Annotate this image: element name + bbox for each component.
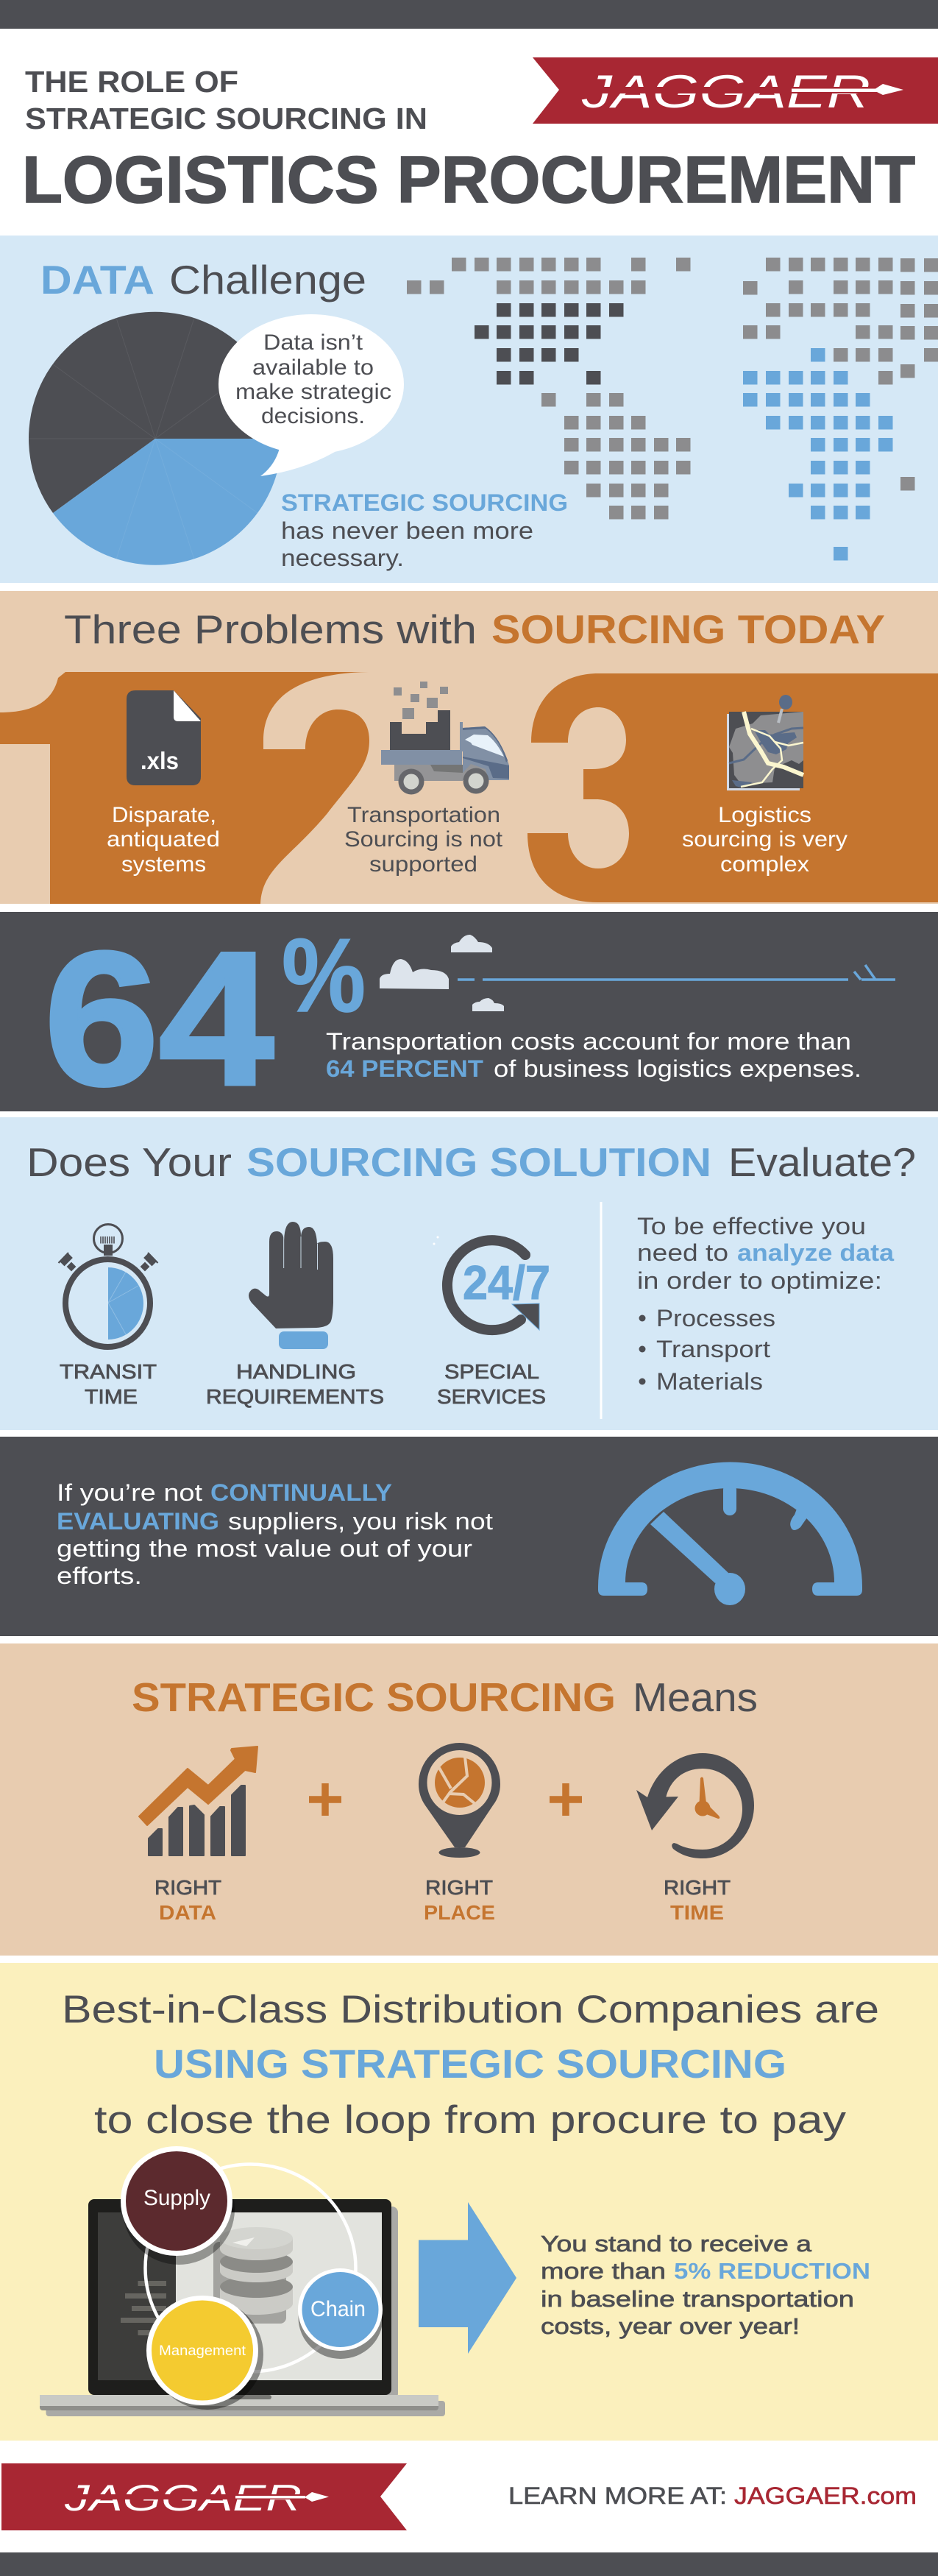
labels: right data, place, time: RIGHT (664, 1876, 731, 1899)
icon: rising chart (139, 1747, 257, 1855)
heading: strategic sourcing means: STRATEGIC SOURCING (132, 1674, 616, 1720)
speech bubble: Data isn’t (263, 330, 363, 355)
text: analyze data: Processes (656, 1305, 775, 1331)
big number 64%: % (282, 917, 366, 1034)
panel: best-in-class (0, 1963, 938, 2441)
labels: transit, handling, special: TRANSIT (60, 1360, 157, 1383)
text: 5% reduction: 5% REDUCTION (674, 2258, 870, 2284)
circle: supply (121, 2146, 232, 2256)
text: problem 1: Disparate, (112, 803, 216, 827)
heading: data challenge (40, 257, 366, 302)
logo ribbon: Jaggaer footer: JAGGAER (64, 2477, 302, 2519)
text: 5% reduction: more than (541, 2258, 666, 2284)
database icon (213, 2227, 293, 2324)
text: learn more: LEARN MORE AT: (508, 2483, 727, 2509)
heading: best-in-class: USING STRATEGIC SOURCING (154, 2041, 786, 2087)
icon: stopwatch (59, 1225, 157, 1347)
heading: three problems: Three Problems with (64, 606, 477, 652)
numerals 1 and 2 (0, 672, 372, 904)
panel: 64 percent (0, 912, 938, 1125)
text: 5% reduction: costs, year over year! (541, 2313, 800, 2339)
labels: transit, handling, special: TIME (85, 1385, 138, 1408)
icon: plus (309, 1783, 341, 1816)
dot world map (407, 258, 938, 561)
heading: three problems: SOURCING TODAY (491, 606, 885, 652)
panel: footer (1, 2463, 917, 2530)
text: analyze data: need to (637, 1239, 728, 1266)
text: problem 3: sourcing is very (682, 827, 848, 852)
heading: sourcing solution: Does Your (26, 1139, 232, 1185)
labels: right data, place, time (154, 1876, 731, 1924)
text: learn more: JAGGAER.com (734, 2483, 917, 2509)
text: continually evaluating: getting the most value out of your (57, 1535, 472, 1562)
text: analyze data: Materials (656, 1368, 763, 1395)
title: THE ROLE OF (25, 65, 238, 99)
text: problem 1: antiquated (107, 827, 220, 852)
text: strategic sourcing necessary (281, 489, 568, 571)
arrow (419, 2202, 516, 2354)
heading: sourcing solution (26, 1139, 916, 1185)
circle: chain: Chain (310, 2297, 366, 2321)
labels: right data, place, time: TIME (670, 1901, 724, 1924)
pie chart (29, 312, 282, 565)
text: problem 1: systems (121, 852, 206, 877)
speech bubble: available to (252, 355, 374, 380)
text: analyze data: in order to optimize: (637, 1267, 882, 1294)
circle: management: Management (159, 2343, 246, 2359)
icon: gauge (598, 1462, 862, 1605)
big number 64%: 64 (44, 912, 275, 1125)
heading: strategic sourcing means: Means (633, 1674, 758, 1720)
speech bubble (218, 314, 404, 476)
text: learn more (508, 2483, 917, 2509)
heading: data challenge: Challenge (169, 257, 366, 302)
text: 5% reduction (541, 2231, 870, 2339)
text: continually evaluating: If you’re not (57, 1479, 202, 1506)
icon: location pin (419, 1743, 500, 1858)
heading: best-in-class (62, 1988, 879, 2142)
labels: transit, handling, special: SERVICES (437, 1385, 546, 1408)
icon: plus (550, 1783, 582, 1816)
text: strategic sourcing necessary: has never been more (281, 517, 533, 544)
text: analyze data: To be effective you (637, 1213, 866, 1239)
icon: xls file: .xls (141, 747, 179, 774)
labels: transit, handling, special: HANDLING (236, 1360, 356, 1383)
icon: plane trail (458, 965, 895, 980)
labels: right data, place, time: RIGHT (425, 1876, 493, 1899)
text: continually evaluating: CONTINUALLY (210, 1479, 392, 1506)
text: continually evaluating: EVALUATING (57, 1508, 219, 1535)
icon: map with pin (727, 695, 803, 790)
heading: sourcing solution: Evaluate? (728, 1139, 916, 1185)
text: continually evaluating: suppliers, you risk not (228, 1508, 493, 1535)
icon: truck (381, 682, 509, 795)
logo ribbon: Jaggaer footer (1, 2463, 407, 2530)
text: problem 3 (682, 803, 848, 877)
text: problem 2: supported (369, 852, 477, 877)
text: analyze data: analyze data (737, 1239, 894, 1266)
text: problem 2: Transportation (347, 803, 500, 827)
heading: data challenge: DATA (40, 257, 154, 302)
text: transportation costs: of business logistics expenses. (494, 1055, 861, 1082)
labels: right data, place, time: RIGHT (154, 1876, 221, 1899)
labels: transit, handling, special: REQUIREMENTS (206, 1385, 384, 1408)
title (22, 65, 915, 217)
text: problem 3: Logistics (718, 803, 811, 827)
heading: best-in-class: to close the loop from procure to pay (94, 2098, 847, 2142)
panel: data challenge (0, 236, 938, 583)
heading: sourcing solution: SOURCING SOLUTION (246, 1139, 711, 1185)
icon: 24/7: 24/7 (463, 1256, 550, 1309)
heading: three problems (64, 606, 885, 652)
text: strategic sourcing necessary: STRATEGIC SOURCING (281, 489, 568, 516)
circle: management (146, 2296, 258, 2405)
panel: strategic sourcing means (0, 1643, 938, 1956)
icon: 24/7 (433, 1236, 550, 1330)
labels: right data, place, time: PLACE (424, 1901, 495, 1924)
text: transportation costs: Transportation costs account for more than (326, 1028, 851, 1055)
text: analyze data (637, 1213, 894, 1395)
bottom bar (0, 2552, 938, 2576)
text: 5% reduction: You stand to receive a (541, 2231, 812, 2257)
text: strategic sourcing necessary: necessary. (281, 545, 404, 571)
text: 5% reduction: in baseline transportation (541, 2286, 854, 2312)
icon: clock with arrow (636, 1753, 754, 1858)
labels: right data, place, time: DATA (159, 1901, 216, 1924)
big number 64% (44, 912, 366, 1125)
text: problem 2: Sourcing is not (344, 827, 503, 852)
title: STRATEGIC SOURCING IN (25, 102, 427, 135)
circle: supply: Supply (143, 2186, 210, 2210)
icon: clouds (380, 935, 504, 1011)
panel: continually evaluating (0, 1437, 938, 1636)
panel: header (22, 57, 938, 217)
illustration: laptop with supply chain loop (40, 2146, 445, 2416)
title: LOGISTICS PROCUREMENT (22, 144, 915, 217)
panel: sourcing solution (0, 1117, 938, 1430)
labels: transit, handling, special: SPECIAL (444, 1360, 539, 1383)
text: continually evaluating (57, 1479, 493, 1589)
speech bubble: decisions. (261, 404, 365, 428)
circle: chain (298, 2268, 383, 2351)
text: analyze data: Transport (656, 1336, 770, 1362)
heading: best-in-class: Best-in-Class Distribution Companies are (62, 1988, 879, 2031)
text: continually evaluating: efforts. (57, 1563, 142, 1589)
icon: hand (249, 1222, 333, 1349)
text: problem 1 (107, 803, 220, 877)
text: problem 3: complex (720, 852, 809, 877)
logo ribbon: Jaggaer (533, 57, 938, 124)
logo ribbon: Jaggaer: JAGGAER (581, 66, 870, 118)
numeral 3 (527, 673, 938, 902)
text: transportation costs (326, 1028, 861, 1082)
speech bubble: make strategic (235, 380, 391, 404)
top bar (0, 0, 938, 29)
labels: transit, handling, special (60, 1360, 546, 1408)
text: problem 2 (344, 803, 503, 877)
icon: xls file (127, 690, 201, 785)
panel: three problems (0, 591, 938, 904)
text: transportation costs: 64 PERCENT (326, 1055, 483, 1082)
